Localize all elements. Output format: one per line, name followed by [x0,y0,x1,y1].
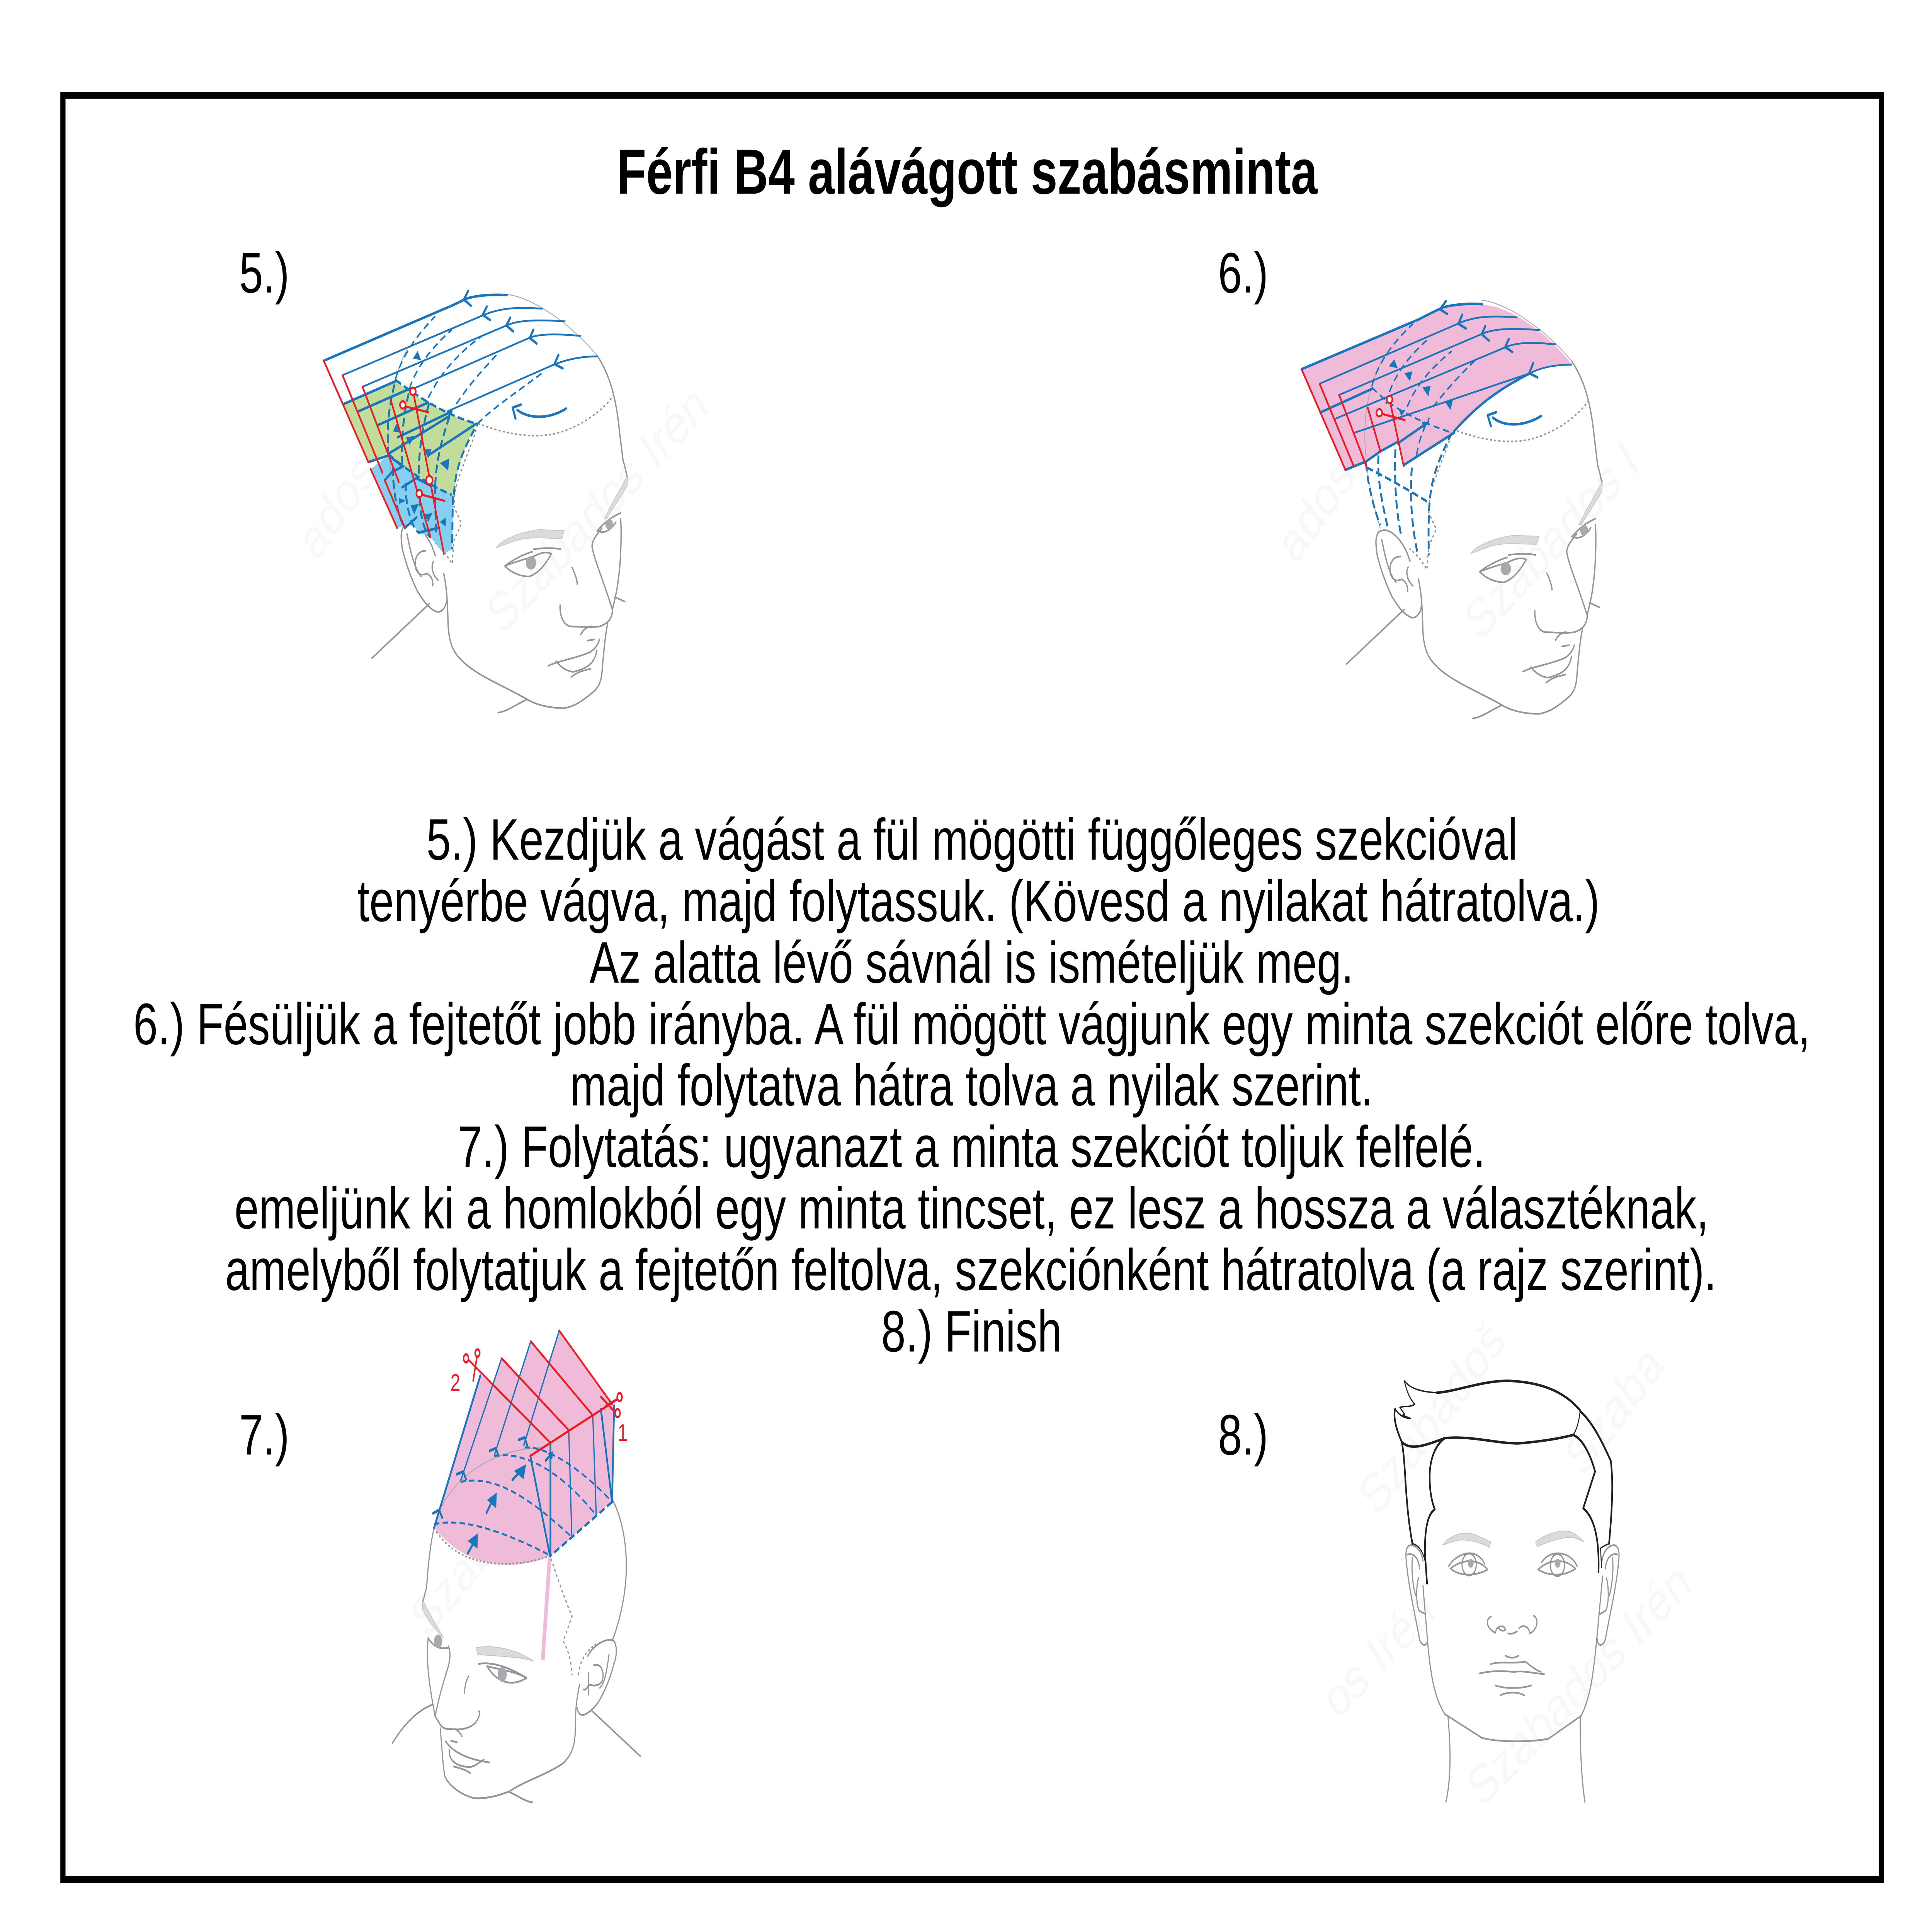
watermark: step 8 [1314,1308,1699,1819]
blue comb lines [1301,301,1572,470]
right eyebrow [1536,1531,1584,1547]
watermark: step 5 [289,372,716,646]
head back curve [388,350,407,525]
watermark: step 5: Szabados Irén [478,372,716,646]
face outline [1423,1577,1602,1802]
illustration: step 7 head [393,1331,641,1803]
left ear [1406,1545,1428,1645]
watermark: step 6 [1268,429,1647,652]
head outline [393,1447,641,1803]
direction arrows [468,1451,553,1553]
right eye [1538,1553,1577,1576]
green section [344,381,476,495]
instructions text block: 6.) Fésüljük a fejtetőt jobb irányba. A fül mögött vágjunk egy minta szekciót előre tolva, [133,992,1810,1057]
step label 5: 5.) [239,240,289,305]
scissors 2 [464,1349,480,1381]
title: Férfi B4 alávágott szabásminta [617,136,1318,207]
red cut lines [468,1331,615,1456]
watermark: step 6: ados [1268,444,1364,574]
pink section [1301,304,1572,470]
step label 6: 6.) [1218,240,1268,305]
head outline [372,294,628,713]
blue dashed guides [1366,324,1475,555]
instructions text block: tenyérbe vágva, majd folytassuk. (Kövesd a nyilakat hátratolva.) [357,869,1600,934]
direction arrowheads [393,351,449,527]
watermark: step 8: os Irén [1314,1577,1443,1731]
red cut lines [324,361,444,554]
rotation arrow [513,405,566,418]
scissors [1376,396,1405,420]
blue section [371,456,454,554]
instructions text block: amelyből folytatjuk a fejtetőn feltolva, szekciónként hátratolva (a rajz szerint). [225,1238,1716,1303]
watermark: step 8: Szabados Irén [1459,1549,1699,1819]
instructions text block: emeljünk ki a homlokból egy minta tincset, ez lesz a hossza a választéknak, [235,1176,1709,1241]
direction arrowheads [1389,359,1453,428]
illustration: step 6 head [1301,300,1602,718]
left eye [1449,1553,1488,1575]
blue dashed guides [434,1447,612,1556]
watermark: step 6: Szabados I [1456,429,1647,652]
watermark: step 7: Szabadoš [401,1437,571,1648]
blue comb lines [324,291,598,532]
instructions text block: Az alatta lévő sávnál is ismételjük meg. [590,930,1354,995]
watermark: step 8: Szabadoš [1350,1308,1514,1527]
illustration: step 5 head [324,291,628,713]
illustration: step 8 finished head [1395,1381,1619,1802]
blue dashed guides [388,316,543,549]
nose [1487,1616,1537,1634]
watermark: step 5: ados [289,440,384,571]
instructions text block: 7.) Folytatás: ugyanazt a minta szekciót toljuk felfelé. [458,1114,1485,1180]
instructions text block: majd folytatva hátra tolva a nyilak szerint. [570,1053,1373,1118]
watermark: step 8: Szaba [1556,1332,1672,1488]
blue section lines [433,1331,614,1556]
pink fan section [434,1331,614,1565]
head back curve [1365,352,1386,528]
red cut lines [1301,369,1404,470]
pink parting strand [543,1558,549,1660]
number 1: 1 [618,1419,628,1446]
instructions text block: 8.) Finish [881,1299,1062,1364]
left eyebrow [1442,1533,1491,1547]
scissors 1 [601,1393,622,1417]
instructions text block [133,807,1810,1364]
step label 8: 8.) [1218,1403,1268,1467]
scissors [400,388,445,501]
number 2: 2 [451,1369,460,1396]
step label 7: 7.) [239,1403,289,1467]
instructions text block: 5.) Kezdjük a vágást a fül mögötti függőleges szekcióval [427,807,1517,872]
head outline [1347,300,1602,718]
right ear [1597,1545,1619,1645]
mouth [1480,1656,1544,1696]
hair outline [1395,1381,1612,1583]
rotation arrow [1488,412,1541,426]
